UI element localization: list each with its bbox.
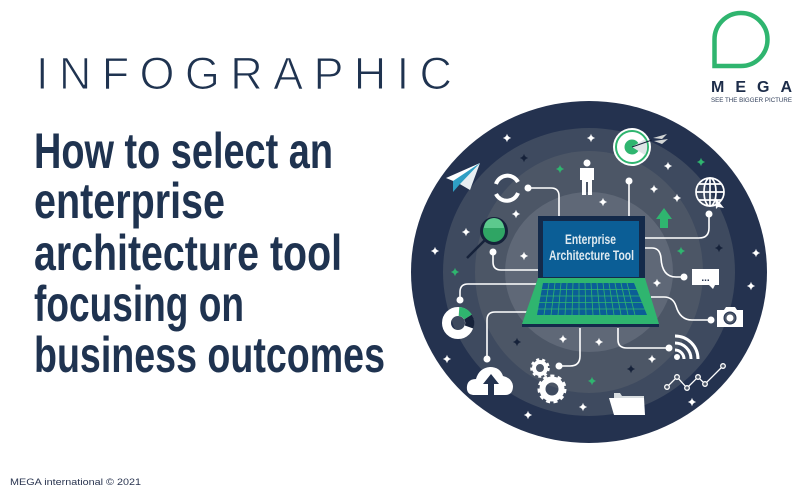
laptop keyboard xyxy=(537,283,647,315)
icon: sync arrows xyxy=(496,176,518,201)
title: how to select: focusing on xyxy=(34,276,244,332)
icon: globe with cursor xyxy=(696,178,724,209)
laptop xyxy=(522,216,659,327)
title: how to select: How to select an xyxy=(34,123,333,179)
icon: cloud upload xyxy=(467,367,513,396)
icon: camera xyxy=(717,307,743,327)
logo: MEGA: SEE THE BIGGER PICTURE xyxy=(711,98,792,104)
decorative stars xyxy=(431,134,760,419)
title: how to select: business outcomes xyxy=(34,327,385,383)
icon: wifi signal xyxy=(675,336,698,359)
icon: paper plane xyxy=(446,163,480,192)
dark stars xyxy=(513,154,723,373)
icon: green up arrow xyxy=(656,208,672,228)
connector lines xyxy=(460,181,711,366)
icon: speech bubble: ... xyxy=(701,273,710,284)
icon: line chart xyxy=(665,364,725,390)
logo: MEGA xyxy=(711,13,792,104)
laptop base xyxy=(522,278,659,324)
laptop screen xyxy=(538,216,645,278)
connector nodes xyxy=(456,178,714,370)
icon: target with dart xyxy=(613,128,668,166)
icon: magnifying glass xyxy=(467,218,506,258)
icon: speech bubble xyxy=(692,269,719,289)
green stars xyxy=(451,158,705,385)
laptop screen: Architecture Tool xyxy=(549,247,634,263)
illustration: concentric circle xyxy=(411,101,767,443)
laptop screen: Enterprise xyxy=(565,231,616,247)
icon: donut chart xyxy=(446,312,470,334)
title: how to select xyxy=(34,123,385,383)
logo: MEGA: MEGA xyxy=(711,79,792,96)
footer copyright: MEGA international © 2021 xyxy=(10,477,141,488)
icon: folder xyxy=(609,393,645,415)
icon: gears xyxy=(532,360,565,402)
icon: person xyxy=(580,160,594,195)
title: how to select: enterprise xyxy=(34,173,225,229)
heading: INFOGRAPHIC: INFOGRAPHIC xyxy=(36,48,452,99)
title: how to select: architecture tool xyxy=(34,225,342,281)
